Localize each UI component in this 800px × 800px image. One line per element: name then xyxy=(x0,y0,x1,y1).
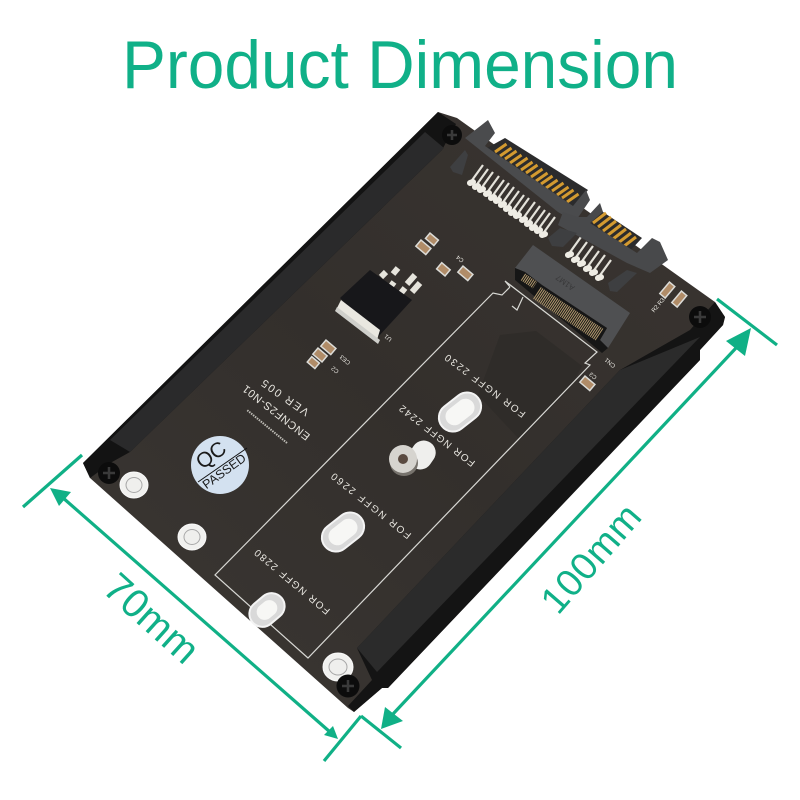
solder pads xyxy=(470,182,601,278)
board silk text: FOR NGFF 2260 xyxy=(329,470,414,540)
housing feet xyxy=(450,150,637,292)
mounting holes xyxy=(120,472,353,681)
dimension: 70mm xyxy=(23,455,361,761)
board silk text: FOR NGFF 2242 xyxy=(397,402,478,468)
M.2 socket: A1M7 xyxy=(554,272,576,292)
dimension: 100mm xyxy=(361,299,777,748)
standoff xyxy=(389,436,440,476)
title: Product Dimension xyxy=(122,27,678,103)
dimension: 70mm: 70mm xyxy=(95,565,208,673)
M.2 zone shading xyxy=(478,331,582,440)
board silk text: C2 xyxy=(330,364,341,374)
board silk text: CN1 xyxy=(604,356,617,368)
gold contacts xyxy=(495,144,636,247)
board silk text xyxy=(241,253,667,616)
board silk text: FOR NGFF 2230 xyxy=(443,351,528,419)
screws xyxy=(98,125,711,698)
left metal rail xyxy=(83,112,456,478)
serial marking xyxy=(247,410,287,443)
M.2 slot outline xyxy=(215,281,597,658)
board silk text: CE3 xyxy=(339,353,352,365)
board silk text: ENCNF2S-N01 xyxy=(241,382,313,442)
contact shelves xyxy=(487,138,588,208)
QC passed sticker: PASSED xyxy=(200,451,249,492)
QC passed sticker: QC xyxy=(192,437,231,474)
PCB board xyxy=(83,112,725,712)
board silk text: VER 005 xyxy=(260,376,312,418)
mounting slots xyxy=(244,387,487,632)
solder pins xyxy=(470,165,611,278)
small SMD components xyxy=(307,233,687,391)
housing xyxy=(465,120,590,222)
QC passed sticker xyxy=(191,436,249,494)
right metal rail xyxy=(348,302,725,712)
board silk text: U1 xyxy=(383,332,394,342)
M.2 socket xyxy=(515,245,630,353)
dimension: 100mm: 100mm xyxy=(533,496,650,622)
SATA connector xyxy=(450,120,668,292)
product: M.2 to SATA adapter board xyxy=(83,112,725,712)
board silk text: FOR NGFF 2280 xyxy=(252,546,333,616)
voltage regulator chip xyxy=(335,268,420,344)
board silk text: C4 xyxy=(455,253,466,263)
board silk text: R2 R3 xyxy=(651,297,667,314)
board silk text: C3 xyxy=(588,370,599,380)
